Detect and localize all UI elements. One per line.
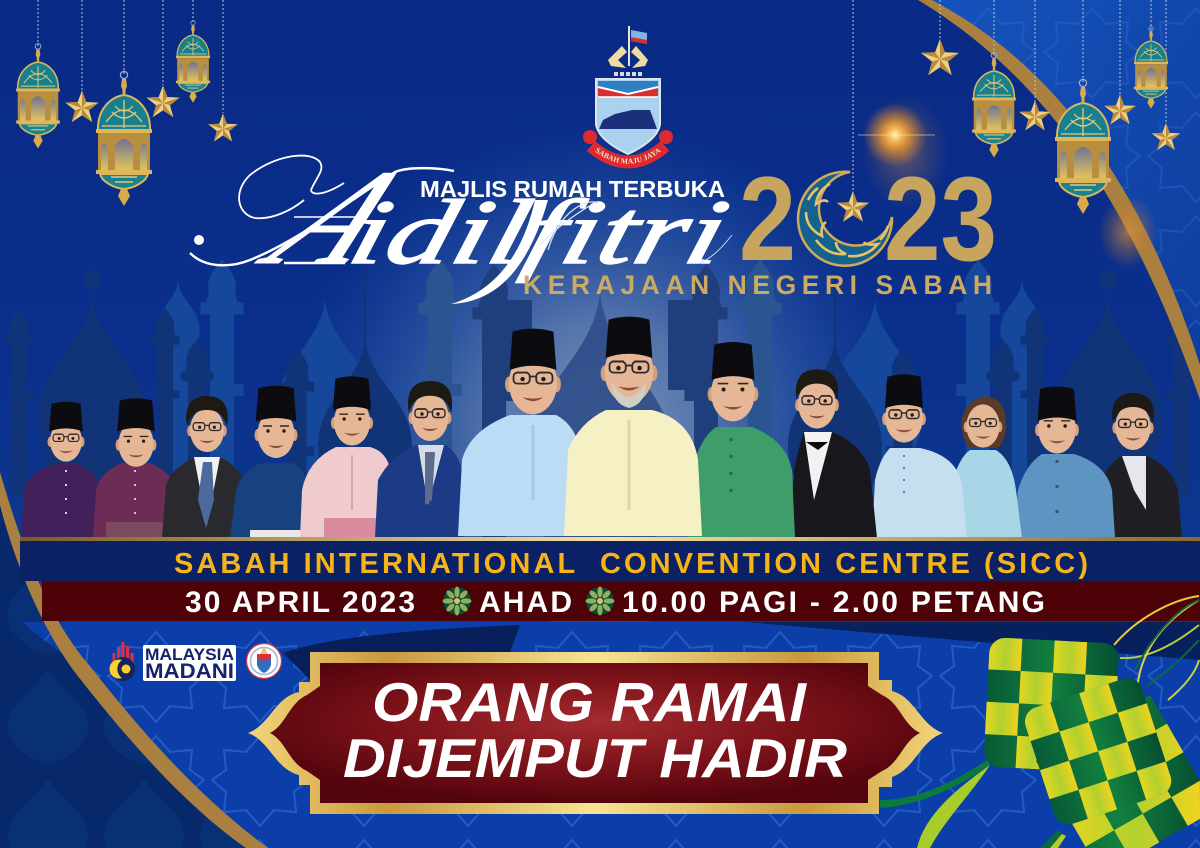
person 13 [1014,386,1115,538]
glow: orange lens flare [858,94,1158,270]
person 4 [230,386,306,538]
ketupat: back right [1036,695,1200,848]
banner: date and time: AHAD [479,586,572,619]
person 8 [564,317,702,536]
ketupat: back left [983,637,1119,773]
banner: date and time [42,581,1200,621]
person 5 [300,376,392,538]
panel: bottom section background [0,472,1200,848]
hanging lanterns and stars: left [16,0,238,206]
logo: round state emblem [246,644,282,678]
title: Kerajaan Negeri Sabah: KERAJAAN NEGERI SABAH [523,270,992,300]
person 9 [688,342,795,538]
ketupat ribbons [880,596,1199,848]
icon: flower ornament left [442,586,472,616]
heading: Dijemput Hadir: DIJEMPUT HADIR [343,727,847,789]
person 3 [162,396,246,538]
title: Aidilfitri script: idilfitri [339,182,739,284]
logo: Malaysia Madani: MALAYSIA [145,646,234,664]
person 14 [1095,393,1182,538]
person 12 [945,397,1022,538]
banner: venue [20,537,1200,581]
icon: ornate crescent moon [798,172,892,266]
heading: Orang Ramai: ORANG RAMAI [372,671,808,733]
title: 2023 with crescent [739,152,997,286]
person 1 [21,402,101,538]
title: Aidilfitri script [190,143,739,304]
banner: date and time: 10.00 PAGI - 2.00 PETANG [622,586,1045,619]
mosque silhouette [5,259,1195,640]
icon: Sabah state crest: SABAH MAJU JAYA [595,148,661,164]
person 6 [375,381,463,538]
hanging lanterns and stars: right [853,0,1180,214]
person 2 [93,398,177,538]
logo: Malaysia Madani: MADANI [145,660,234,683]
icon: Sabah state crest [583,26,673,168]
ketupat: front [1021,674,1175,828]
person 11 [872,374,967,538]
panel: top-right corner with gold curved band [918,0,1200,400]
title: 2023 with crescent: 2 [739,152,796,286]
person 10 [790,369,877,538]
title: Majlis Rumah Terbuka: MAJLIS RUMAH TERBUKA [420,176,725,202]
icon: flower ornament right [586,586,614,616]
banner: date and time: 30 APRIL 2023 [185,586,415,619]
panel: invitation sign [248,652,943,814]
portraits row [21,317,1182,538]
person 7 [458,329,586,536]
title: Aidilfitri script: A [229,143,447,293]
logo: Malaysia Madani [109,642,236,683]
title: 2023 with crescent: 23 [884,152,997,286]
banner: venue: SABAH INTERNATIONAL CONVENTION CENTRE (SICC) [174,548,1088,580]
